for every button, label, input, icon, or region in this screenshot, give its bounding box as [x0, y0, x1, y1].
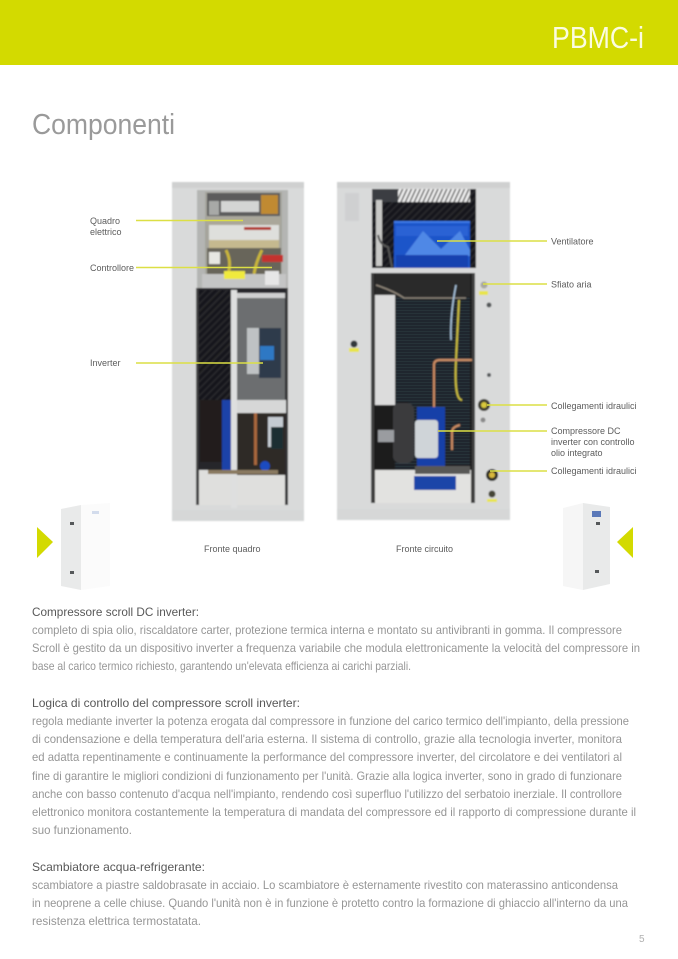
labels: circuit components: Sfiato aria: [551, 280, 592, 290]
labels: circuit components: Compressore DC: [551, 426, 621, 436]
labels: circuit components: inverter con controllo: [551, 437, 635, 447]
text block: compressore scroll: completo di spia olio, riscaldatore carter, protezione termica interna e montato su antivibranti in gomma. Il compressore: [32, 623, 622, 637]
labels: front panel components: Inverter: [90, 358, 121, 368]
text block: logica di controllo: suo funzionamento.: [32, 823, 132, 837]
text block: compressore scroll: Scroll è gestito da un dispositivo inverter a frequenza variabile che modula elettronicamente la velocità del compressore in: [32, 641, 640, 655]
caption: fronte circuito: Fronte circuito: [396, 544, 453, 554]
text block: compressore scroll: Compressore scroll DC inverter:: [32, 605, 199, 619]
text block: logica di controllo: anche con basso contenuto d'acqua nell'impianto, rendendo così superfluo l'utilizzo del serbatoio inerziale. Il controllore: [32, 787, 622, 801]
text block: scambiatore: Scambiatore acqua-refrigerante:: [32, 860, 205, 874]
labels: circuit components: Ventilatore: [551, 236, 594, 246]
photo: fronte circuito unit: [337, 182, 510, 520]
text block: compressore scroll: base al carico termico richiesto, garantendo un'elevata efficienza ai carichi parziali.: [32, 659, 411, 673]
text block: scambiatore: resistenza elettrica termostatata.: [32, 914, 201, 928]
leader lines: [136, 220, 547, 471]
product name: PBMC-i: [552, 20, 644, 55]
text block: logica di controllo: ed adatta repentinamente e continuamente la performance del compressore inverter, del circolatore e dei ventilatori al: [32, 750, 622, 764]
labels: front panel components: [90, 216, 134, 368]
page number: 5: [639, 934, 645, 945]
text block: logica di controllo: elettronico monitora costantemente la temperatura di mandata del compressore ed il rapporto di compressione durante il: [32, 805, 636, 819]
labels: front panel components: Quadro: [90, 216, 120, 226]
labels: front panel components: Controllore: [90, 263, 134, 273]
text block: logica di controllo: di condensazione e della temperatura dell'aria esterna. Il sistema di controllo, grazie alla tecnologia inverter, monitora: [32, 732, 622, 746]
icon: right mini unit with arrow: [563, 503, 633, 590]
text block: logica di controllo: Logica di controllo del compressore scroll inverter:: [32, 696, 300, 710]
labels: front panel components: elettrico: [90, 227, 122, 237]
labels: circuit components: olio integrato: [551, 448, 603, 458]
text block: logica di controllo: [32, 696, 636, 837]
text block: scambiatore: [32, 860, 628, 928]
page title: Componenti: [32, 109, 175, 141]
text block: compressore scroll: [32, 605, 640, 673]
labels: circuit components: [551, 236, 637, 476]
text block: logica di controllo: regola mediante inverter la potenza erogata dal compressore in funzione del carico termico dell'impianto, della pressione: [32, 714, 629, 728]
text block: scambiatore: in neoprene a celle chiuse. Quando l'unità non è in funzione è protetto contro la formazione di ghiaccio all'interno da una: [32, 896, 628, 910]
text block: logica di controllo: fine di garantire le migliori condizioni di funzionamento per l'unità. Grazie alla logica inverter, sono in grado di funzionare: [32, 769, 622, 783]
header band: [0, 0, 678, 65]
caption: fronte quadro: Fronte quadro: [204, 544, 261, 554]
photo: fronte quadro unit: [172, 182, 304, 521]
labels: circuit components: Collegamenti idraulici: [551, 401, 637, 411]
labels: circuit components: Collegamenti idraulici: [551, 466, 637, 476]
icon: left mini unit with arrow: [37, 503, 110, 590]
text block: scambiatore: scambiatore a piastre saldobrasate in acciaio. Lo scambiatore è esternamente rivestito con materassino anticondensa: [32, 878, 618, 892]
